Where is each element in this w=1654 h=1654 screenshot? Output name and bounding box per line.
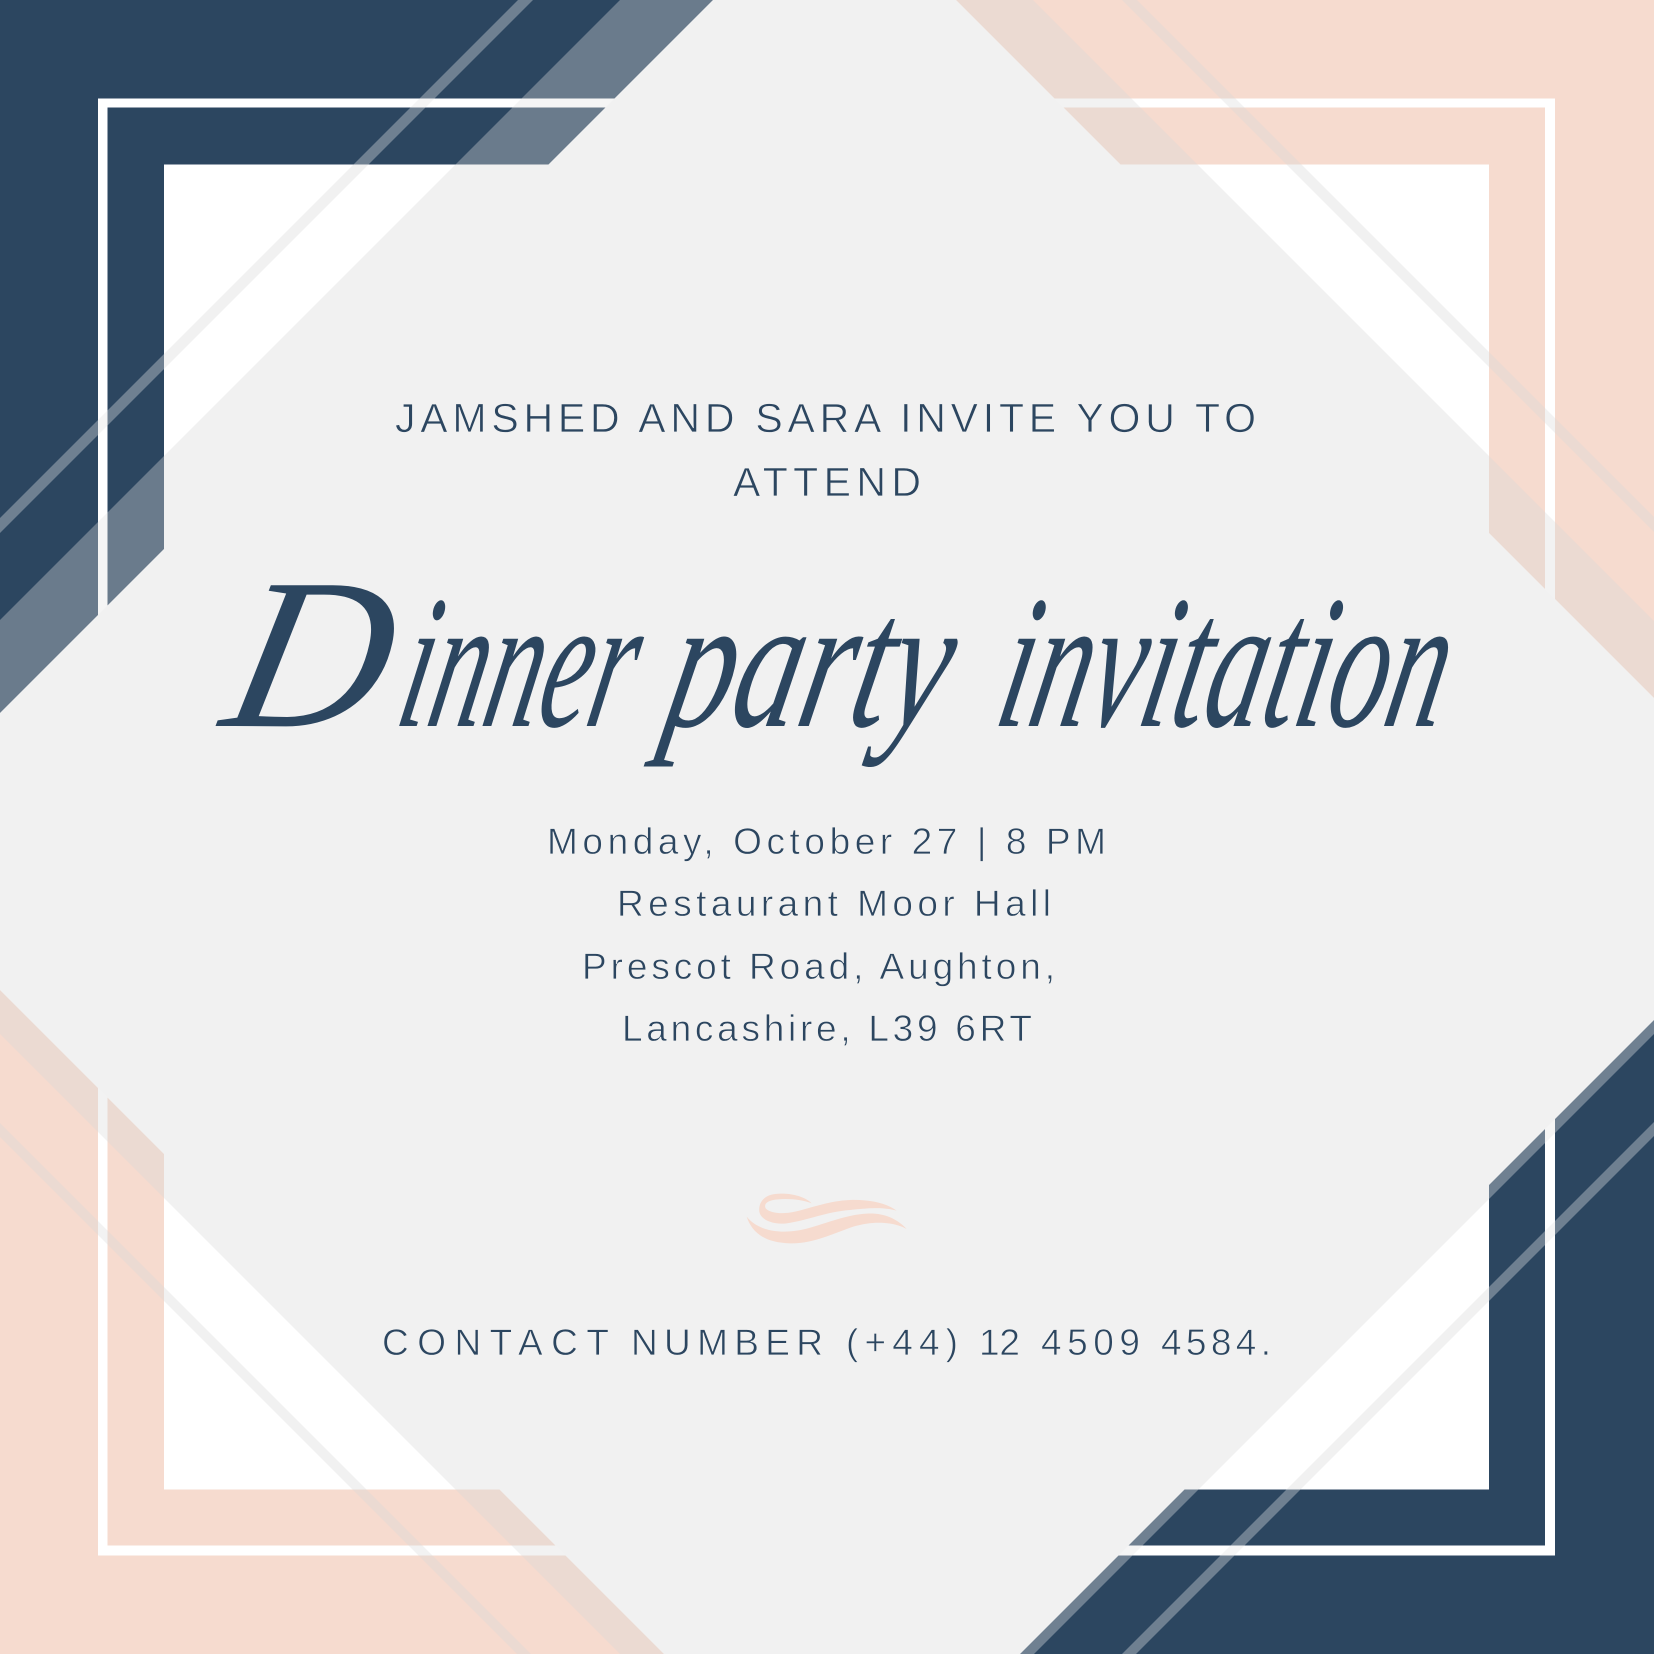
contact number: [382, 1322, 1271, 1363]
corner panel: top left navy: [0, 0, 713, 713]
title: party: [643, 557, 976, 768]
contact number: 12: [979, 1322, 1020, 1363]
contact number: 4584.: [1161, 1322, 1271, 1363]
event details: [547, 821, 1106, 1049]
corner panel: bottom right navy: [1020, 1020, 1654, 1654]
title: [205, 535, 1474, 773]
contact number: CONTACT: [382, 1322, 609, 1363]
contact number: NUMBER: [631, 1322, 823, 1363]
corner panel: bottom left peach: [0, 990, 664, 1654]
corner panel: top right peach: [956, 0, 1654, 698]
title: D: [205, 535, 419, 773]
contact number: 4509: [1041, 1322, 1140, 1363]
invitation intro text: JAMSHED AND SARA INVITE YOU TO: [395, 395, 1256, 441]
event details: Lancashire, L39 6RT: [622, 1008, 1032, 1049]
title: inner: [384, 557, 662, 768]
invitation intro text: ATTEND: [733, 459, 921, 505]
contact number: (+44): [846, 1322, 958, 1363]
icon: peach swoosh ornament: [747, 1194, 907, 1243]
invitation intro text: [395, 395, 1256, 505]
event details: Prescot Road, Aughton,: [582, 946, 1055, 987]
event details: Monday, October 27 | 8 PM: [547, 821, 1106, 862]
event details: Restaurant Moor Hall: [617, 883, 1051, 924]
